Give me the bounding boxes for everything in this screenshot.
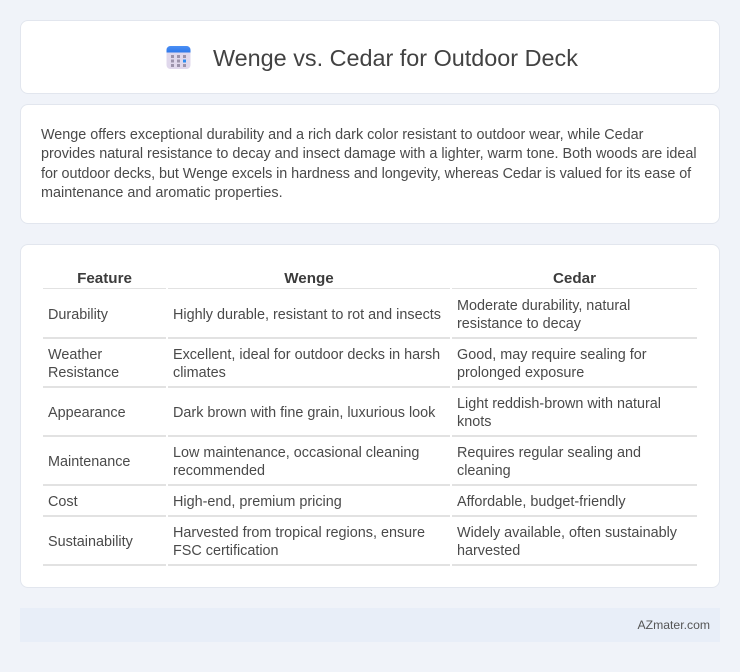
- table: Light reddish-brown with natural: [457, 396, 661, 412]
- table: resistance to decay: [457, 316, 581, 332]
- table: Harvested from tropical regions, ensure: [173, 525, 425, 541]
- panel: description: [20, 104, 720, 224]
- title: Wenge vs. Cedar for Outdoor Deck: [213, 45, 578, 71]
- column heading: Cedar: Cedar: [553, 270, 596, 287]
- row: Sustainability: [48, 525, 677, 559]
- table: Excellent, ideal for outdoor decks in harsh: [173, 347, 440, 363]
- row: Weather Resistance: [48, 347, 647, 381]
- table: Appearance: [48, 405, 126, 421]
- description text: maintenance and aromatic properties.: [41, 185, 283, 201]
- table: climates: [173, 365, 226, 381]
- table: Moderate durability, natural: [457, 298, 630, 314]
- table: Widely available, often sustainably: [457, 525, 677, 541]
- footer credit: AZmater.com: [638, 618, 710, 632]
- description text: [41, 127, 697, 201]
- table: Highly durable, resistant to rot and insects: [173, 307, 441, 323]
- row: Maintenance: [48, 445, 641, 479]
- panel: header: [20, 20, 720, 94]
- column heading: Feature: Feature: [77, 270, 132, 287]
- icon: calendar: [166, 46, 190, 69]
- table: FSC certification: [173, 543, 279, 559]
- table: Low maintenance, occasional cleaning: [173, 445, 419, 461]
- description text: Wenge offers exceptional durability and a rich dark color resistant to outdoor wear, while Cedar: [41, 127, 643, 143]
- column heading: Wenge: Wenge: [284, 270, 334, 287]
- table: Affordable, budget-friendly: [457, 494, 626, 510]
- table: recommended: [173, 463, 265, 479]
- table: Resistance: [48, 365, 119, 381]
- row: Cost: [48, 494, 626, 510]
- table: High-end, premium pricing: [173, 494, 342, 510]
- table: Dark brown with fine grain, luxurious look: [173, 405, 435, 421]
- panel: comparison table: [20, 244, 720, 588]
- table: Maintenance: [48, 454, 130, 470]
- table: Requires regular sealing and: [457, 445, 641, 461]
- table: Good, may require sealing for: [457, 347, 647, 363]
- description text: provides natural resistance to decay and insect damage with a lighter, warm tone. Both woods are ideal: [41, 146, 697, 162]
- table: prolonged exposure: [457, 365, 584, 381]
- row: Appearance: [48, 396, 661, 430]
- table: harvested: [457, 543, 520, 559]
- table: Weather: [48, 347, 102, 363]
- table: Sustainability: [48, 534, 133, 550]
- table: Cost: [48, 494, 78, 510]
- row: Durability: [48, 298, 630, 332]
- footer bar: [20, 608, 720, 642]
- table: cleaning: [457, 463, 511, 479]
- table: knots: [457, 414, 491, 430]
- description text: for outdoor decks, but Wenge excels in hardness and longevity, whereas Cedar is valued for its ease of: [41, 166, 691, 182]
- table: Durability: [48, 307, 108, 323]
